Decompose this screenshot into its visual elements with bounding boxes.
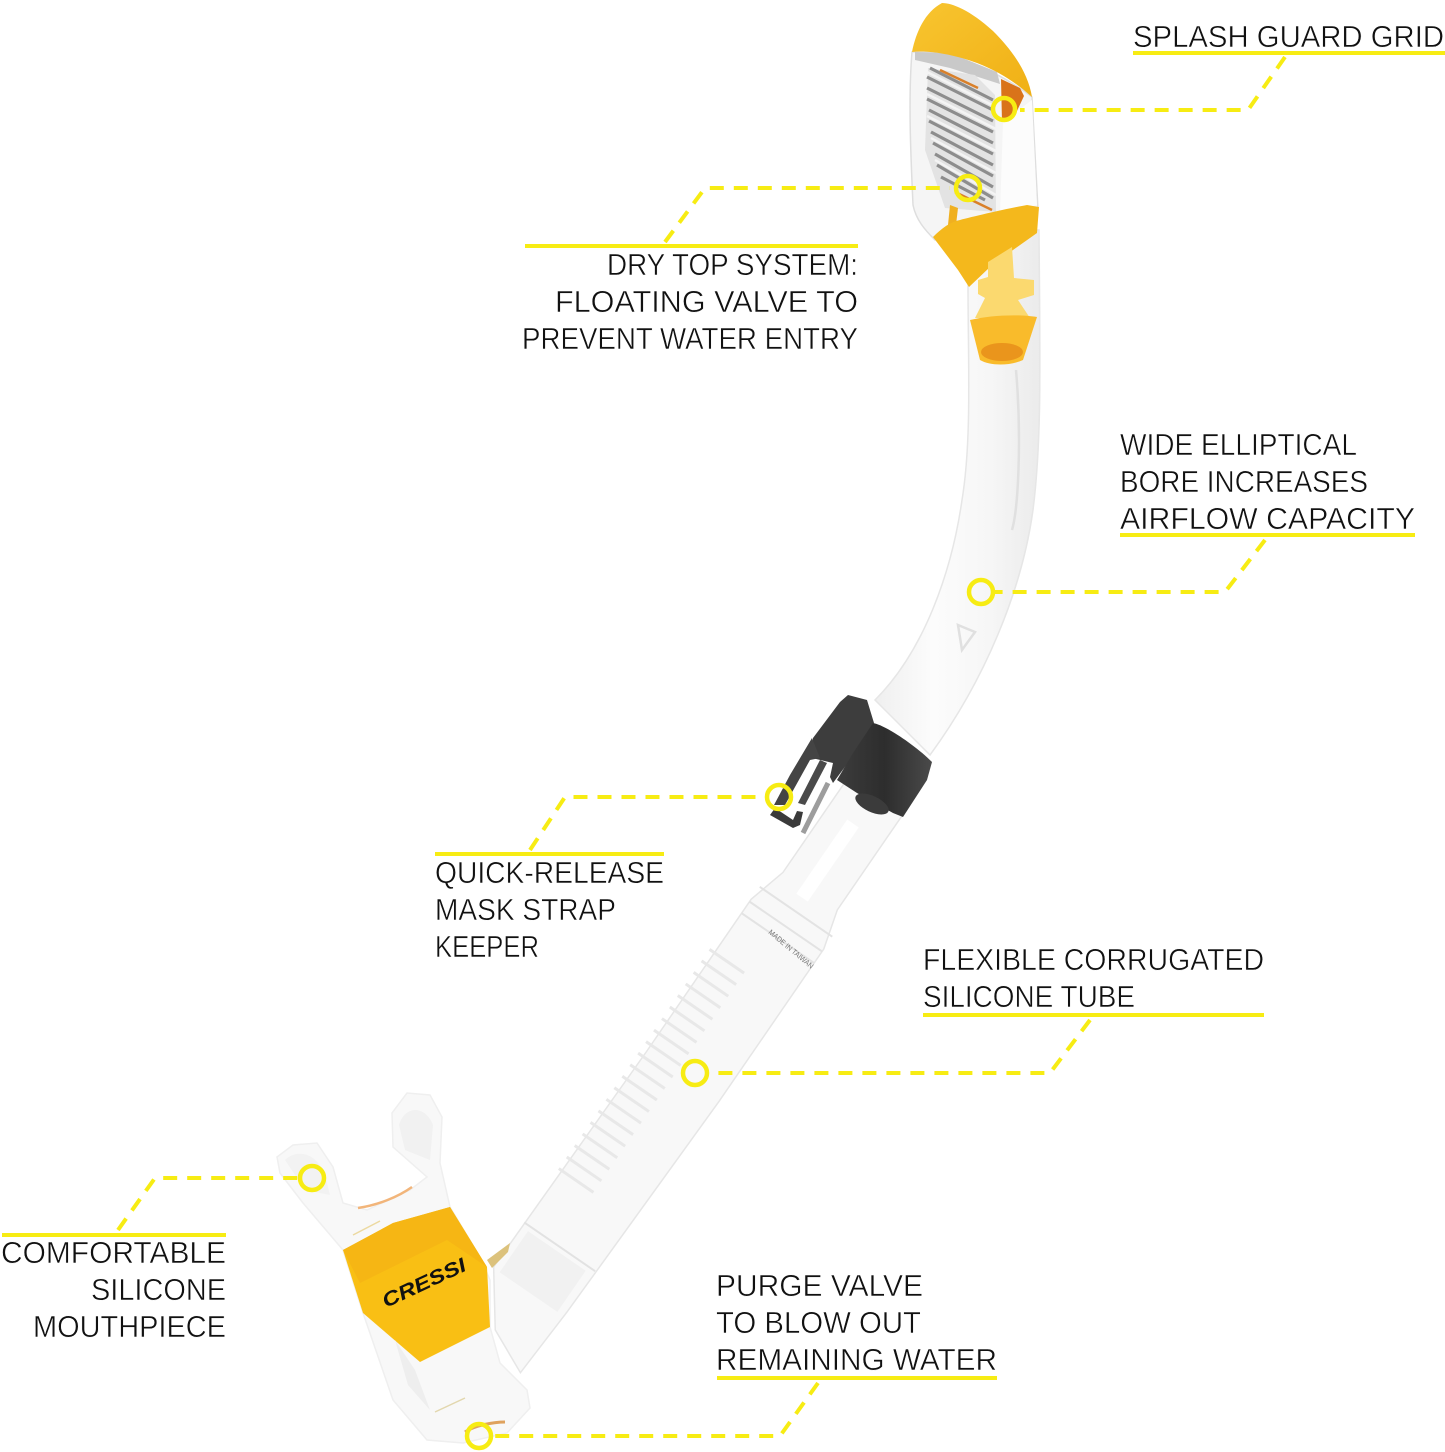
- callout: mask strap keeper: QUICK-RELEASE: [435, 855, 664, 890]
- orange inner valve: [1001, 79, 1024, 122]
- callout: dry top system: PREVENT WATER ENTRY: [522, 321, 858, 356]
- tube base joint accent: [487, 1243, 510, 1268]
- top yellow cap: [912, 3, 1032, 97]
- corrugations: [559, 949, 744, 1192]
- callout: mouthpiece: MOUTHPIECE: [33, 1309, 226, 1344]
- yellow grip band: [343, 1207, 490, 1362]
- callout: purge valve: REMAINING WATER: [716, 1342, 997, 1377]
- left prong: [774, 738, 820, 805]
- made in taiwan moulded text: MADE IN TAIWAN: [767, 928, 815, 971]
- leader: corrugated tube: [683, 1020, 1090, 1085]
- callout: purge valve: [716, 1268, 997, 1378]
- orange mouth detail: [358, 1187, 412, 1208]
- callout: elliptical bore: WIDE ELLIPTICAL: [1120, 427, 1357, 462]
- cressi logo: CRESSI: [379, 1254, 470, 1313]
- clip band: [837, 723, 932, 817]
- callout: dry top system: FLOATING VALVE TO: [555, 284, 858, 319]
- callout: elliptical bore: BORE INCREASES: [1120, 464, 1368, 499]
- bite tabs texture: [399, 1110, 433, 1160]
- lower straight and corrugated tube: [451, 768, 912, 1378]
- callout: mouthpiece: COMFORTABLE: [1, 1235, 226, 1270]
- grey shadow under cap: [915, 52, 1000, 84]
- callout: elliptical bore: AIRFLOW CAPACITY: [1120, 501, 1415, 536]
- callout: corrugated tube: SILICONE TUBE: [923, 979, 1135, 1014]
- callout: mouthpiece: SILICONE: [91, 1272, 226, 1307]
- mask strap keeper clip: [770, 695, 932, 833]
- inner prong: [798, 760, 827, 805]
- upper curved tube: [875, 230, 1040, 755]
- clear side window: [1000, 100, 1037, 214]
- snorkel illustration: [277, 3, 1040, 1443]
- tube highlight: [958, 370, 1019, 650]
- translucent long prong: [803, 783, 828, 833]
- lower yellow collar: [933, 205, 1039, 287]
- leader: dry top system: [665, 176, 980, 242]
- silicone mouthpiece: [277, 1093, 530, 1443]
- callout: corrugated tube: FLEXIBLE CORRUGATED: [923, 942, 1264, 977]
- splash guard body: [910, 52, 1038, 240]
- callout: dry top system: DRY TOP SYSTEM:: [607, 247, 858, 282]
- purge valve detail: [465, 1422, 505, 1432]
- callout: purge valve: PURGE VALVE: [716, 1268, 923, 1303]
- callout: dry top system: [522, 246, 858, 356]
- hook: [770, 808, 803, 828]
- floating valve: [970, 247, 1037, 364]
- callout: corrugated tube: [923, 942, 1264, 1015]
- callout: mask strap keeper: MASK STRAP: [435, 892, 616, 927]
- upper clip block: [812, 695, 874, 783]
- callout: mask strap keeper: KEEPER: [435, 929, 539, 964]
- leader: elliptical bore: [969, 540, 1265, 604]
- splash guard grid: [925, 68, 996, 225]
- callout: purge valve: TO BLOW OUT: [716, 1305, 921, 1340]
- leader: splash guard grid: [993, 57, 1285, 120]
- callout: mouthpiece: [1, 1235, 226, 1344]
- callout: elliptical bore: [1120, 427, 1415, 536]
- callout: mask strap keeper: [435, 854, 664, 964]
- leader: mask strap keeper: [530, 785, 791, 850]
- leader: purge valve: [467, 1383, 818, 1448]
- leader: mouthpiece: [118, 1166, 324, 1230]
